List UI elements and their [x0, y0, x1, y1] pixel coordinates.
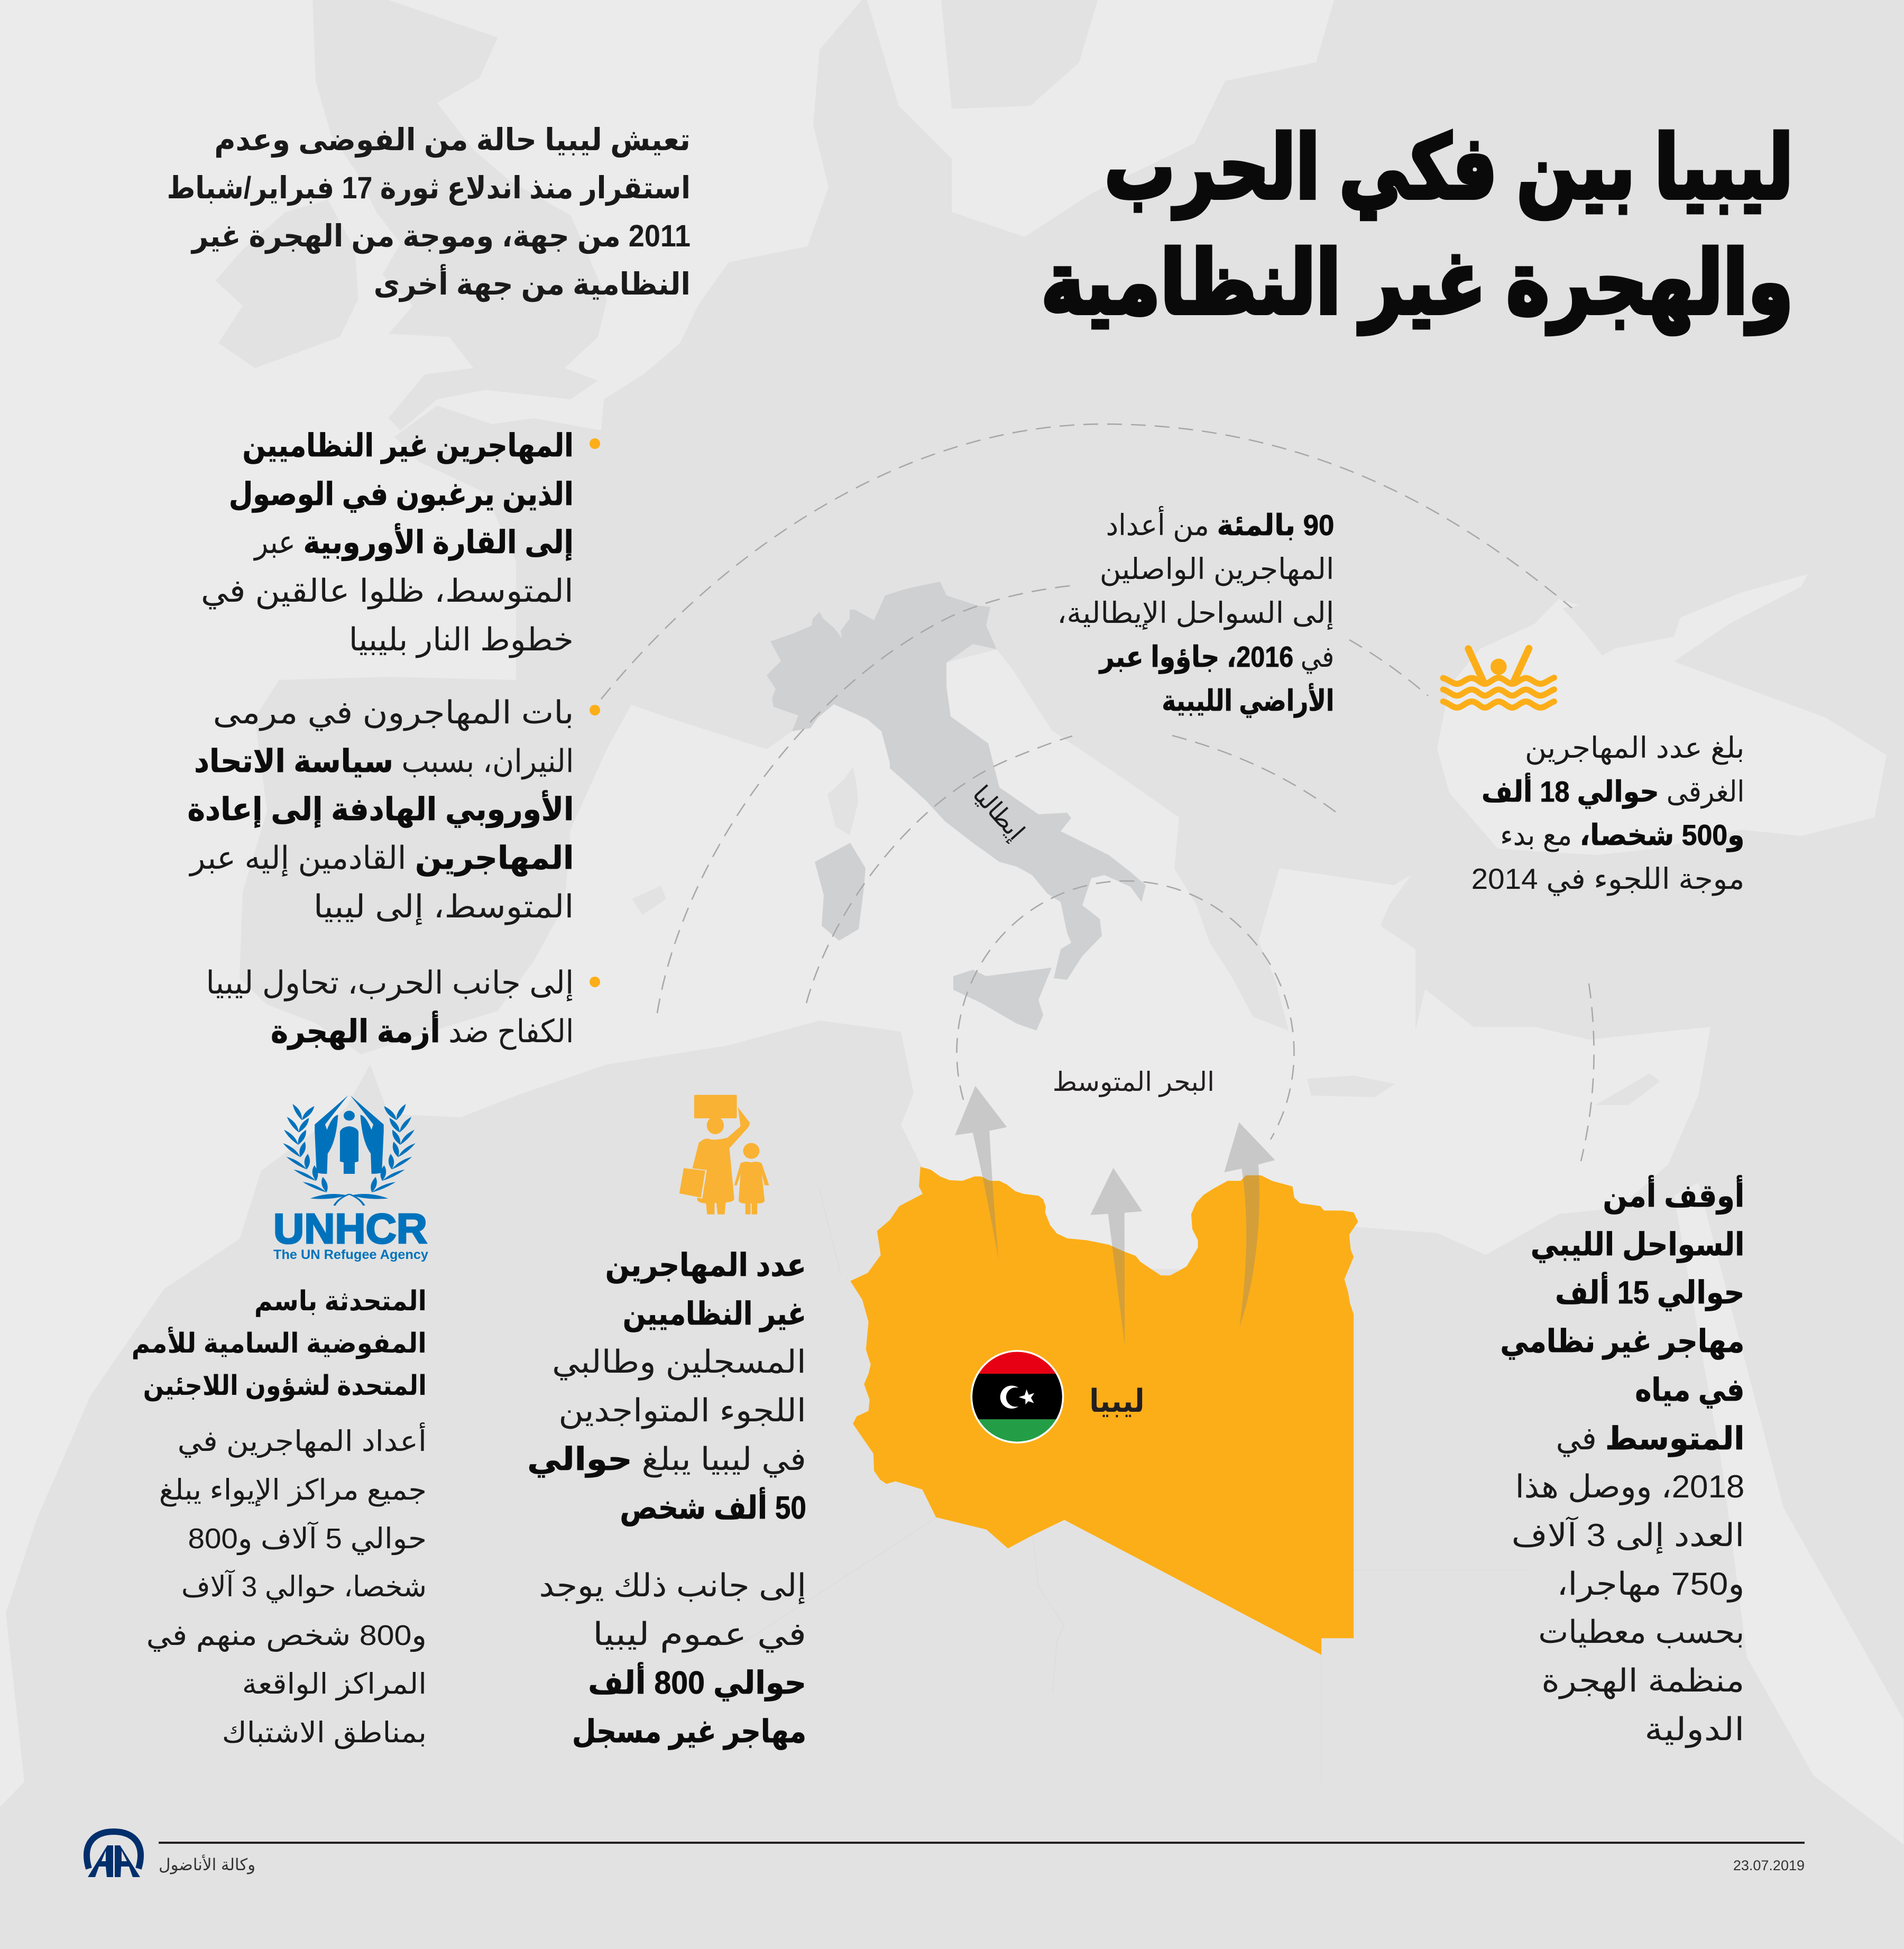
bullet text 1: المتوسط، ظلوا عالقين في — [201, 573, 574, 609]
island: Sicily — [953, 968, 1052, 1031]
title: ليبيا بين فكي الحرب — [1104, 119, 1793, 216]
text: registered migrants: غير النظاميين — [623, 1296, 806, 1331]
bullet text 1: المهاجرين غير النظاميين — [243, 428, 574, 463]
text: drowned migrants: الغرقى حوالي 18 ألف — [1482, 775, 1744, 808]
country: Italy — [767, 582, 1146, 980]
label: Libya: ليبيا — [1090, 1383, 1145, 1419]
text: UNHCR shelter figures: شخصا، حوالي 3 آلاف — [181, 1571, 427, 1603]
text: UNHCR shelter figures: و800 شخص منهم في — [146, 1620, 427, 1651]
text: 90 percent: الأراضي الليبية — [1162, 684, 1334, 717]
text: coast guard: أوقف أمن — [1603, 1178, 1744, 1213]
bullet text 2 — [187, 695, 574, 925]
text: coast guard: و750 مهاجرا، — [1557, 1566, 1744, 1602]
label: Italy: إيطاليا — [968, 780, 1030, 845]
logo: UNHCR — [273, 1096, 428, 1262]
text: unregistered migrants: حوالي 800 ألف — [588, 1665, 806, 1700]
text: UNHCR shelter figures: حوالي 5 آلاف و800 — [188, 1523, 427, 1555]
text: unregistered migrants — [539, 1568, 806, 1750]
text: UNHCR shelter figures: أعداد المهاجرين في — [178, 1426, 427, 1457]
text: registered migrants: اللجوء المتواجدين — [559, 1393, 806, 1428]
text: coast guard: الدولية — [1644, 1712, 1744, 1747]
text: registered migrants — [527, 1247, 806, 1527]
bullet text 3: إلى جانب الحرب، تحاول ليبيا — [206, 965, 574, 1000]
text: unregistered migrants: مهاجر غير مسجل — [572, 1714, 806, 1749]
text: UNHCR spokesperson heading: المفوضية السامية للأمم — [132, 1328, 427, 1359]
footer date: 23.07.2019 — [1733, 1858, 1805, 1873]
text: coast guard: منظمة الهجرة — [1541, 1663, 1744, 1698]
text: coast guard — [1500, 1175, 1744, 1748]
UNHCR tagline: The UN Refugee Agency — [273, 1247, 428, 1262]
text: registered migrants: 50 ألف شخص — [620, 1490, 806, 1525]
label: Mediterranean Sea: البحر المتوسط — [1053, 1067, 1215, 1097]
bullet text 2: بات المهاجرون في مرمى — [213, 695, 574, 730]
text: 90 percent — [1057, 506, 1334, 718]
bullet text 2: المهاجرين القادمين إليه عبر — [190, 840, 574, 876]
bullet text 1: الذين يرغبون في الوصول — [229, 476, 574, 512]
text: coast guard: في مياه — [1635, 1372, 1744, 1408]
bullet text 2: الأوروبي الهادفة إلى إعادة — [187, 792, 574, 827]
text: coast guard: حوالي 15 ألف — [1555, 1275, 1744, 1310]
text: unregistered migrants: إلى جانب ذلك يوجد — [539, 1568, 806, 1603]
bullet dots — [590, 438, 600, 987]
text: coast guard: 2018، ووصل هذا — [1515, 1469, 1744, 1504]
intro text: تعيش ليبيا حالة من الفوضى وعدم — [214, 123, 691, 157]
text: 90 percent: في 2016، جاؤوا عبر — [1099, 640, 1334, 673]
footer agency name: وكالة الأناضول — [159, 1855, 255, 1874]
icon: drowning person — [1443, 648, 1554, 707]
text: registered migrants: في ليبيا يبلغ حوالي — [527, 1441, 806, 1477]
intro text: النظامية من جهة أخرى — [374, 267, 691, 301]
bullet text 2: المتوسط، إلى ليبيا — [313, 889, 574, 924]
bullet text 3 — [206, 965, 574, 1050]
text: UNHCR spokesperson heading: المتحدة لشؤون اللاجئين — [143, 1371, 427, 1401]
text: coast guard: السواحل الليبي — [1530, 1227, 1744, 1262]
logo: Anadolu Agency — [87, 1832, 141, 1877]
text: UNHCR shelter figures — [146, 1422, 427, 1749]
dashed migration arcs — [601, 424, 1594, 1161]
text: UNHCR spokesperson heading — [132, 1286, 427, 1402]
text: 90 percent: 90 بالمئة من أعداد — [1106, 509, 1334, 541]
text: UNHCR shelter figures: المراكز الواقعة — [242, 1668, 427, 1700]
text: coast guard: المتوسط في — [1556, 1421, 1744, 1456]
text: UNHCR spokesperson heading: المتحدثة باسم — [254, 1286, 427, 1317]
footer rule — [159, 1842, 1805, 1844]
text: coast guard: العدد إلى 3 آلاف — [1511, 1518, 1744, 1553]
text: drowned migrants: موجة اللجوء في 2014 — [1471, 862, 1744, 895]
country borders — [740, 1190, 1528, 1782]
text: drowned migrants — [1471, 731, 1744, 896]
text: 90 percent: المهاجرين الواصلين — [1099, 553, 1334, 585]
icon: Libyan flag — [971, 1350, 1064, 1444]
text: coast guard: مهاجر غير نظامي — [1500, 1323, 1744, 1359]
bullet text 1: إلى القارة الأوروبية عبر — [254, 525, 574, 560]
map of Libya with flag and arrows — [850, 1086, 1358, 1655]
text: UNHCR shelter figures: بمناطق الاشتباك — [222, 1717, 427, 1749]
text: coast guard: بحسب معطيات — [1538, 1614, 1744, 1650]
title — [1041, 119, 1793, 336]
island: Sardinia — [815, 843, 866, 941]
arrow 1 — [955, 1086, 1007, 1261]
islands and peninsulas — [216, 0, 1660, 1105]
icon: woman and child refugees — [678, 1095, 769, 1215]
text: UNHCR shelter figures: جميع مراكز الإيواء يبلغ — [159, 1474, 427, 1506]
arrow 3 — [1224, 1122, 1275, 1327]
text: 90 percent: إلى السواحل الإيطالية، — [1057, 596, 1334, 629]
text: unregistered migrants: في عموم ليبيا — [593, 1616, 806, 1652]
text: registered migrants: عدد المهاجرين — [605, 1247, 806, 1283]
text: registered migrants: المسجلين وطالبي — [552, 1344, 806, 1380]
text: drowned migrants: بلغ عدد المهاجرين — [1524, 731, 1744, 764]
bullet text 2: النيران، بسبب سياسة الاتحاد — [194, 743, 574, 779]
intro text — [167, 123, 691, 302]
bullet text 3: الكفاح ضد أزمة الهجرة — [271, 1014, 574, 1049]
bullet text 1: خطوط النار بليبيا — [349, 622, 574, 657]
Libya shape — [850, 1167, 1358, 1655]
intro text: 2011 من جهة، وموجة من الهجرة غير — [192, 219, 691, 253]
intro text: استقرار منذ اندلاع ثورة 17 فبراير/شباط — [167, 171, 691, 205]
text: drowned migrants: و500 شخصا، مع بدء — [1500, 819, 1744, 851]
title: والهجرة غير النظامية — [1041, 234, 1793, 332]
arrow 2 — [1090, 1168, 1142, 1346]
bullet text 1 — [201, 428, 574, 658]
UNHCR wordmark: UNHCR — [273, 1205, 427, 1252]
